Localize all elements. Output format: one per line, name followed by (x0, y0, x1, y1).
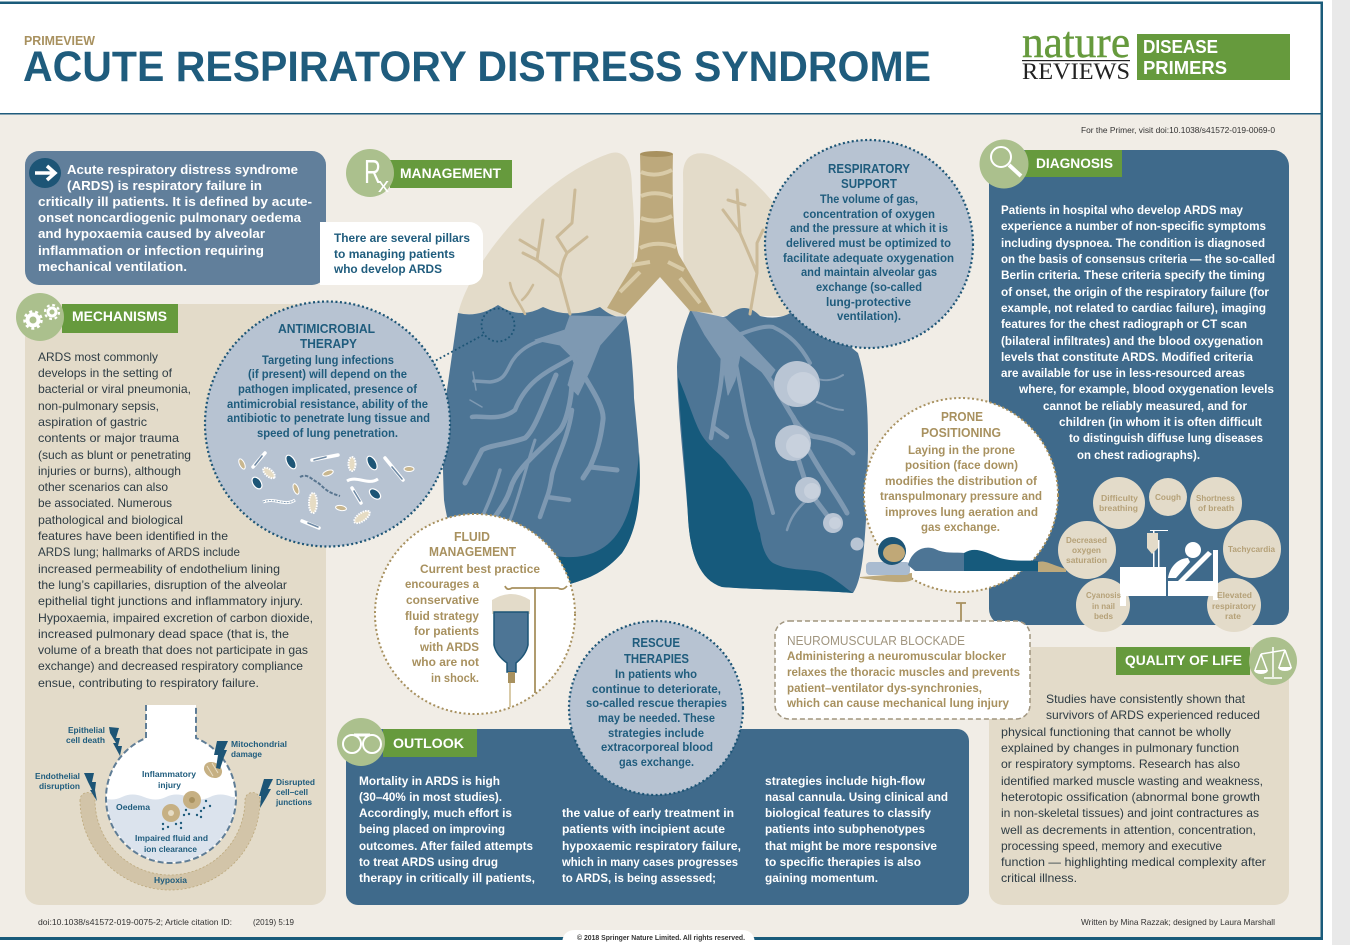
icon: scales (1249, 637, 1297, 685)
diagnosis text (1001, 203, 1275, 462)
outlook column 2: the value of early treatment in (562, 806, 734, 820)
diagnosis text: to distinguish diffuse lung diseases (1069, 431, 1263, 445)
symptom bubbles (1058, 477, 1281, 632)
body: which can cause mechanical lung injury (786, 696, 1009, 710)
symptom labels: Tachycardia (1228, 544, 1275, 554)
symptom labels (1066, 492, 1275, 621)
footer: (2019) 5:19 (253, 917, 294, 927)
icon: IV drip (492, 586, 567, 707)
body: strategies include (608, 726, 704, 740)
panel: neuromuscular blockade (775, 621, 1030, 719)
outlook column 2: to ARDS, is being assessed; (562, 871, 716, 885)
mechanisms text: (such as blunt or penetrating (38, 448, 191, 462)
diagram labels: junctions (275, 797, 312, 807)
upper lung branches (510, 190, 763, 314)
left lung lower (443, 305, 639, 590)
callout: management pillars: to managing patients (334, 247, 455, 261)
trachea and bronchi (607, 151, 713, 315)
outlook column 1: outcomes. After failed attempts (359, 839, 533, 853)
mechanisms text: non-pulmonary sepsis, (38, 399, 159, 413)
heading (921, 410, 1001, 440)
body: continue to deteriorate, (592, 682, 721, 696)
heading: FLUID (454, 530, 490, 544)
logo: Nature Reviews Disease Primers: DISEASE (1143, 37, 1218, 57)
connector to neuromuscular blockade (956, 603, 966, 621)
quality of life text: processing speed, memory and executive (1001, 839, 1222, 853)
logo: Nature Reviews Disease Primers: REVIEWS (1022, 59, 1130, 84)
outlook column 2 (561, 806, 741, 885)
right lung upper (683, 153, 822, 316)
fluid particles (162, 800, 211, 830)
diagnosis text: experience a number of non-specific symptoms (1001, 219, 1266, 233)
footer: © 2018 Springer Nature Limited. All rights reserved. (577, 934, 745, 942)
icon: Rx: x (378, 175, 389, 197)
heading (278, 322, 375, 351)
body: The volume of gas, (820, 192, 918, 206)
header title (23, 33, 931, 91)
symptom labels: rate (1225, 611, 1241, 621)
intro text: Acute respiratory distress syndrome (67, 162, 298, 177)
heading: MECHANISMS (72, 308, 167, 324)
panel: mechanisms (16, 293, 326, 905)
mechanisms text: pathological and biological (38, 513, 183, 527)
callout: management pillars: There are several pillars (334, 231, 470, 245)
body: exchange (so-called (816, 280, 922, 294)
panel: outlook (337, 718, 969, 905)
heading (383, 729, 477, 757)
illustration: lungs (443, 151, 868, 593)
body: may be needed. These (598, 711, 715, 725)
body: conservative (406, 593, 479, 607)
body: improves lung aeration and (885, 505, 1038, 519)
cells and mitochondrion (162, 758, 226, 822)
outlook column 3: patients into subphenotypes (765, 822, 925, 836)
right lung lower (677, 305, 868, 593)
diagnosis text: on chest radiographs). (1077, 448, 1200, 462)
diagram labels: Oedema (116, 802, 150, 812)
body: encourages a (405, 577, 479, 591)
diagnosis text: of onset, the origin of the respiratory failure (for (1001, 285, 1269, 299)
quality of life text: heterotopic ossification (abnormal bone growth (1001, 790, 1260, 804)
heading: PRONE (941, 410, 983, 424)
intro text: onset noncardiogenic pulmonary oedema (38, 210, 302, 225)
mechanisms text: bacterial or viral pneumonia, (38, 382, 191, 396)
mechanisms text: be associated. Numerous (38, 496, 172, 510)
icon: magnifier (980, 140, 1028, 188)
outlook column 3: biological features to classify (765, 806, 931, 820)
symptom labels: Cough (1155, 492, 1181, 502)
footer: Written by Mina Razzak; designed by Laura Marshall (1081, 917, 1275, 927)
icon: arrow (29, 158, 61, 188)
body: pathogen implicated, presence of (238, 382, 418, 396)
mechanisms text: ARDS most commonly (38, 350, 158, 364)
outlook column 1: being placed on improving (359, 822, 505, 836)
panel: quality of life (989, 637, 1297, 905)
heading (624, 636, 689, 666)
diagnosis text: features for the chest radiograph or CT scan (1001, 317, 1247, 331)
diagram labels: Epithelial (68, 725, 105, 735)
symptom labels: Shortness (1196, 493, 1235, 503)
diagram labels: disruption (39, 781, 80, 791)
diagram labels: cell–cell (276, 787, 308, 797)
quality of life text: or respiratory symptoms. Research has also (1001, 757, 1240, 771)
body: with ARDS (419, 640, 479, 654)
mechanisms text: increased permeability of endothelium lining (38, 562, 280, 576)
body: gas exchange. (921, 520, 1000, 534)
right airway branches (692, 311, 853, 530)
outlook column 3: nasal cannula. Using clinical and (765, 790, 948, 804)
heading: THERAPY (300, 337, 358, 351)
intro text: (ARDS) is respiratory failure in (67, 178, 262, 193)
body: transpulmonary pressure and (880, 489, 1042, 503)
logo: Nature Reviews Disease Primers: PRIMERS (1143, 58, 1227, 78)
body (880, 443, 1042, 534)
body: patient–ventilator dys-synchronies, (787, 681, 982, 695)
body: (if present) will depend on the (248, 367, 407, 381)
body: and maintain alveolar gas (801, 265, 937, 279)
heading: SUPPORT (841, 177, 897, 191)
mechanisms text: epithelial tight junctions and inflammatory injury. (38, 594, 303, 608)
mechanisms text: exchange) and decreased respiratory compliance (38, 659, 303, 673)
symptom labels: Difficulty (1101, 493, 1138, 503)
heading: RESCUE (632, 636, 680, 650)
quality of life text: survivors of ARDS experienced reduced (1046, 708, 1260, 722)
callout: management pillars: who develop ARDS (333, 262, 442, 276)
panel: introduction (25, 151, 326, 285)
outlook column 3: that might be more responsive (765, 839, 937, 853)
body: facilitate adequate oxygenation (783, 251, 954, 265)
quality of life text: explained by changes in pulmonary function (1001, 741, 1239, 755)
body: ventilation). (837, 309, 901, 323)
diagnosis text: Patients in hospital who develop ARDS may (1001, 203, 1243, 217)
mechanisms text: aspiration of gastric (38, 415, 147, 429)
diagram labels: Hypoxia (154, 875, 187, 885)
heading (62, 304, 178, 333)
right lung fluid (678, 377, 853, 593)
quality of life text: Studies have consistently shown that (1046, 692, 1246, 706)
body: concentration of oxygen (803, 207, 935, 221)
outlook column 1: Mortality in ARDS is high (359, 774, 500, 788)
body: gas exchange. (619, 755, 694, 769)
symptom labels: Cyanosis (1086, 590, 1121, 600)
diagram labels: damage (231, 749, 262, 759)
body (786, 649, 1020, 710)
mechanisms text: increased pulmonary dead space (that is, the (38, 627, 289, 641)
diagnosis text: example, not related to cardiac failure), imaging (1001, 301, 1266, 315)
heading: ANTIMICROBIAL (278, 322, 375, 336)
panel: antimicrobial therapy (205, 302, 450, 546)
heading: THERAPIES (624, 652, 689, 666)
diagram labels: Disrupted (276, 777, 315, 787)
heading: management: MANAGEMENT (400, 165, 501, 181)
outlook column 3: to specific therapies is also (765, 855, 921, 869)
heading: OUTLOOK (393, 735, 464, 751)
mechanisms text: ensue, contributing to respiratory failure. (38, 676, 259, 690)
intro text (38, 162, 312, 274)
diagnosis text: on the basis of consensus criteria — the so-called (1001, 252, 1275, 266)
heading (429, 530, 516, 559)
icon: Rx: R (364, 153, 381, 190)
mechanisms text (38, 350, 313, 690)
alveoli (774, 361, 864, 550)
hypoxia crescent (80, 793, 260, 890)
footer (38, 917, 1275, 945)
icon: microbes (237, 453, 414, 528)
diagnosis text: (bilateral infiltrates) and the blood oxygenation (1001, 334, 1263, 348)
outlook column 1: Accordingly, much effort is (359, 806, 512, 820)
diagram labels: cell death (66, 735, 105, 745)
body: delivered must be optimized to (786, 236, 951, 250)
diagram labels: Impaired fluid and (135, 833, 208, 843)
icon: Rx (346, 149, 394, 197)
mechanisms text: volume of a breath that does not participate in gas (38, 643, 308, 657)
body: In patients who (615, 667, 697, 681)
diagram labels (35, 725, 315, 885)
title: ACUTE RESPIRATORY DISTRESS SYNDROME (23, 43, 931, 91)
body: speed of lung penetration. (257, 426, 398, 440)
quality of life text: physical functioning that cannot be wholly (1001, 725, 1231, 739)
mechanisms text: ARDS lung; hallmarks of ARDS include (38, 545, 240, 559)
mechanisms text: develops in the setting of (38, 366, 173, 380)
heading (828, 162, 911, 191)
mechanisms text: the lung’s capillaries, disruption of the alveolar (38, 578, 287, 592)
logo: Nature Reviews Disease Primers: nature (1022, 18, 1130, 67)
outlook column 2: which in many cases progresses (561, 855, 738, 869)
mechanisms text: features have been identified in the (38, 529, 228, 543)
diagram labels: Mitochondrial (231, 739, 287, 749)
quality of life text: function — highlighting medical complexity after (1001, 855, 1266, 869)
body: position (face down) (905, 458, 1018, 472)
body: fluid strategy (405, 609, 479, 623)
body (405, 562, 540, 685)
quality of life text: identified marked muscle wasting and weakness, (1001, 774, 1263, 788)
body: in shock. (431, 671, 479, 685)
outlook column 3: gaining momentum. (765, 871, 878, 885)
body: modifies the distribution of (885, 474, 1038, 488)
body: relaxes the thoracic muscles and prevents (787, 665, 1020, 679)
primer reference: For the Primer, visit doi:10.1038/s41572-019-0069-0 (1081, 125, 1275, 135)
panel: fluid management (375, 514, 575, 714)
outlook column 1 (359, 774, 535, 885)
mechanisms text: Hypoxaemia, impaired excretion of carbon dioxide, (38, 611, 313, 625)
body: Targeting lung infections (262, 353, 394, 367)
symptom labels: of breath (1198, 503, 1234, 513)
body: and the pressure at which it is (790, 221, 948, 235)
body: lung-protective (826, 295, 911, 309)
body (227, 353, 430, 440)
outlook column 3 (765, 774, 948, 885)
symptom labels: Decreased (1066, 535, 1107, 545)
diagram labels: Endothelial (35, 771, 80, 781)
intro text: and hypoxaemia caused by alveolar (38, 226, 265, 241)
outlook column 1: (30–40% in most studies). (359, 790, 502, 804)
body (783, 192, 954, 323)
diagram: alveolus injury (35, 705, 315, 890)
icon: binoculars (337, 718, 385, 766)
outlook column 2: patients with incipient acute (562, 822, 725, 836)
diagnosis text: are available for use in less-resourced areas (1001, 366, 1245, 380)
panel: prone positioning (860, 398, 1066, 592)
heading (1025, 150, 1122, 177)
diagnosis text: cannot be reliably measured, and for (1043, 399, 1247, 413)
diagram labels: Inflammatory (142, 769, 196, 779)
body: Laying in the prone (908, 443, 1015, 457)
quality of life text (1000, 692, 1266, 885)
body: who are not (411, 655, 479, 669)
outlook column 1: therapy in critically ill patients, (359, 871, 535, 885)
symptom labels: in nail (1092, 601, 1115, 611)
body: Current best practice (420, 562, 540, 576)
heading: RESPIRATORY (828, 162, 911, 176)
illustration: prone patient (860, 537, 1066, 582)
heading: management (346, 149, 512, 197)
intro text: inflammation or infection requiring (38, 243, 264, 258)
symptom labels: respiratory (1212, 601, 1256, 611)
panel: respiratory support (765, 140, 973, 348)
heading (1116, 647, 1250, 675)
body: extracorporeal blood (601, 740, 713, 754)
quality of life text: in non-skeletal tissues) and joint contractures as (1001, 806, 1259, 820)
icon: patient in bed (1120, 530, 1218, 606)
quality of life text: critical illness. (1001, 871, 1077, 885)
intro text: mechanical ventilation. (38, 259, 187, 274)
left lung upper (458, 152, 634, 316)
heading: MANAGEMENT (429, 545, 516, 559)
mechanisms text: contents or major trauma (38, 431, 179, 445)
symptom labels: oxygen (1072, 545, 1101, 555)
symptom labels: beds (1094, 611, 1113, 621)
diagnosis text: where, for example, blood oxygenation levels (1018, 382, 1274, 396)
outlook column 2: hypoxaemic respiratory failure, (562, 839, 741, 853)
callout: management pillars (320, 222, 483, 285)
footer: doi:10.1038/s41572-019-0075-2; Article citation ID: (38, 917, 232, 927)
body: antimicrobial resistance, ability of the (227, 397, 428, 411)
diagnosis text: children (in whom it is often difficult (1059, 415, 1262, 429)
logo: Nature Reviews Disease Primers (1022, 18, 1290, 84)
body: antibiotic to penetrate lung tissue and (227, 411, 430, 425)
heading: DIAGNOSIS (1036, 155, 1113, 171)
symptom labels: Elevated (1217, 590, 1252, 600)
diagnosis text: levels that constitute ARDS. Modified criteria (1001, 350, 1253, 364)
body (586, 667, 727, 769)
injury bolts (84, 727, 273, 808)
heading: QUALITY OF LIFE (1125, 652, 1242, 668)
magnified region marker (433, 308, 514, 362)
icon: gears (16, 293, 64, 341)
kicker: PRIMEVIEW (24, 33, 96, 48)
outlook column 1: to treat ARDS using drug (359, 855, 498, 869)
mechanisms text: other scenarios can also (38, 480, 168, 494)
mechanisms text: injuries or burns), although (38, 464, 181, 478)
panel: rescue therapies (569, 621, 743, 795)
diagram labels: ion clearance (144, 844, 197, 854)
quality of life text: well as decrements in attention, concentration, (1000, 823, 1256, 837)
body: Administering a neuromuscular blocker (787, 649, 1006, 663)
body: so-called rescue therapies (586, 696, 727, 710)
heading: NEUROMUSCULAR BLOCKADE (787, 633, 965, 648)
symptom labels: saturation (1066, 555, 1107, 565)
heading: POSITIONING (921, 426, 1001, 440)
diagram labels: injury (158, 780, 181, 790)
left lung fluid (556, 452, 640, 584)
intro text: critically ill patients. It is defined by acute- (38, 194, 312, 209)
symptom labels: breathing (1099, 503, 1138, 513)
diagnosis text: Berlin criteria. These criteria specify the timing (1001, 268, 1265, 282)
diagnosis text: including dyspnoea. The condition is diagnosed (1001, 236, 1265, 250)
outlook column 3: strategies include high-flow (765, 774, 926, 788)
left airway branches (465, 316, 625, 545)
alveolus flask (106, 705, 236, 863)
body: for patients (414, 624, 479, 638)
panel: diagnosis (980, 140, 1289, 632)
